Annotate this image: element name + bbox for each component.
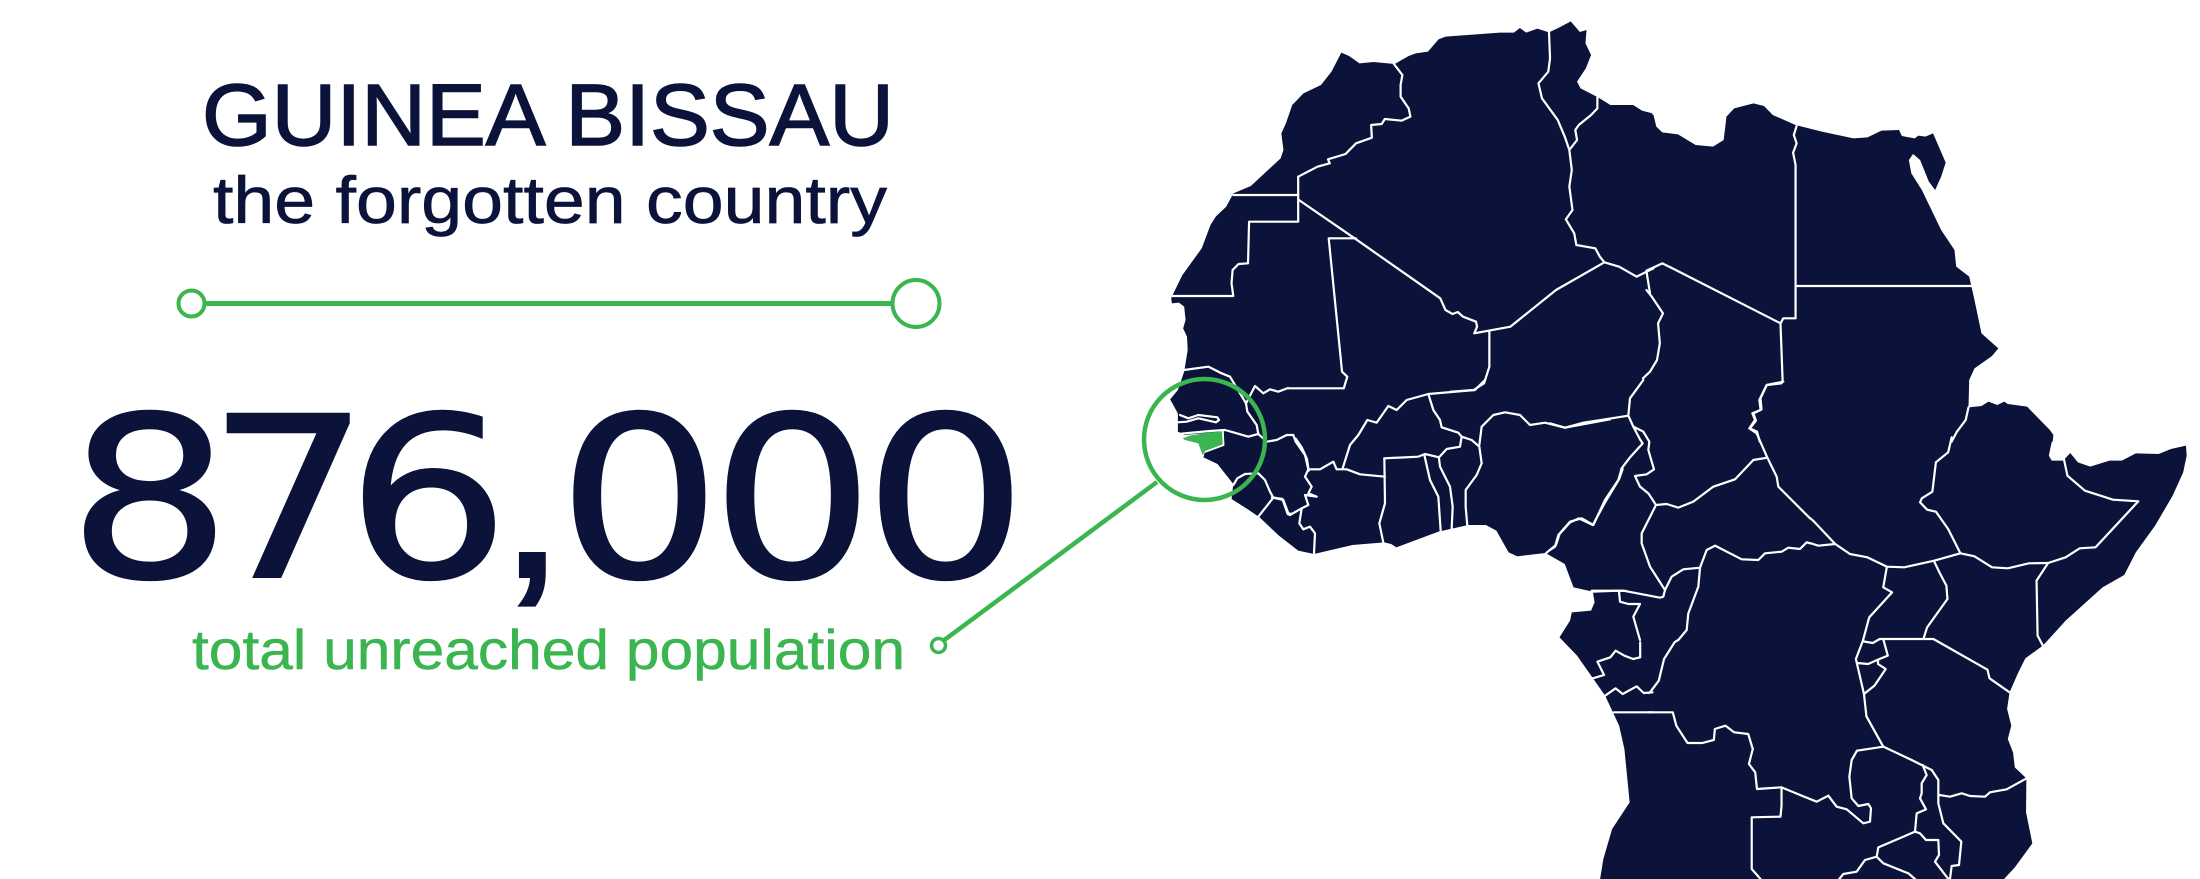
- Guinea Bissau highlight: [1183, 431, 1223, 455]
- big number: 8: [68, 369, 232, 630]
- big number: 0: [711, 369, 875, 630]
- big number: 7: [207, 369, 371, 630]
- big number: 6: [346, 369, 510, 630]
- callout circle and leader line: [932, 379, 1265, 652]
- big number: 0: [864, 369, 1028, 630]
- country borders: [1172, 32, 2138, 879]
- big number: 0: [557, 369, 721, 630]
- subtitle: the forgotten country: [213, 163, 887, 237]
- map of Africa: [1170, 21, 2187, 879]
- landmass: [1170, 21, 2187, 879]
- dumbbell divider: [178, 280, 940, 327]
- big number: ,: [496, 375, 568, 625]
- number caption: total unreached population: [192, 618, 905, 681]
- title: GUINEA BISSAU: [202, 67, 894, 164]
